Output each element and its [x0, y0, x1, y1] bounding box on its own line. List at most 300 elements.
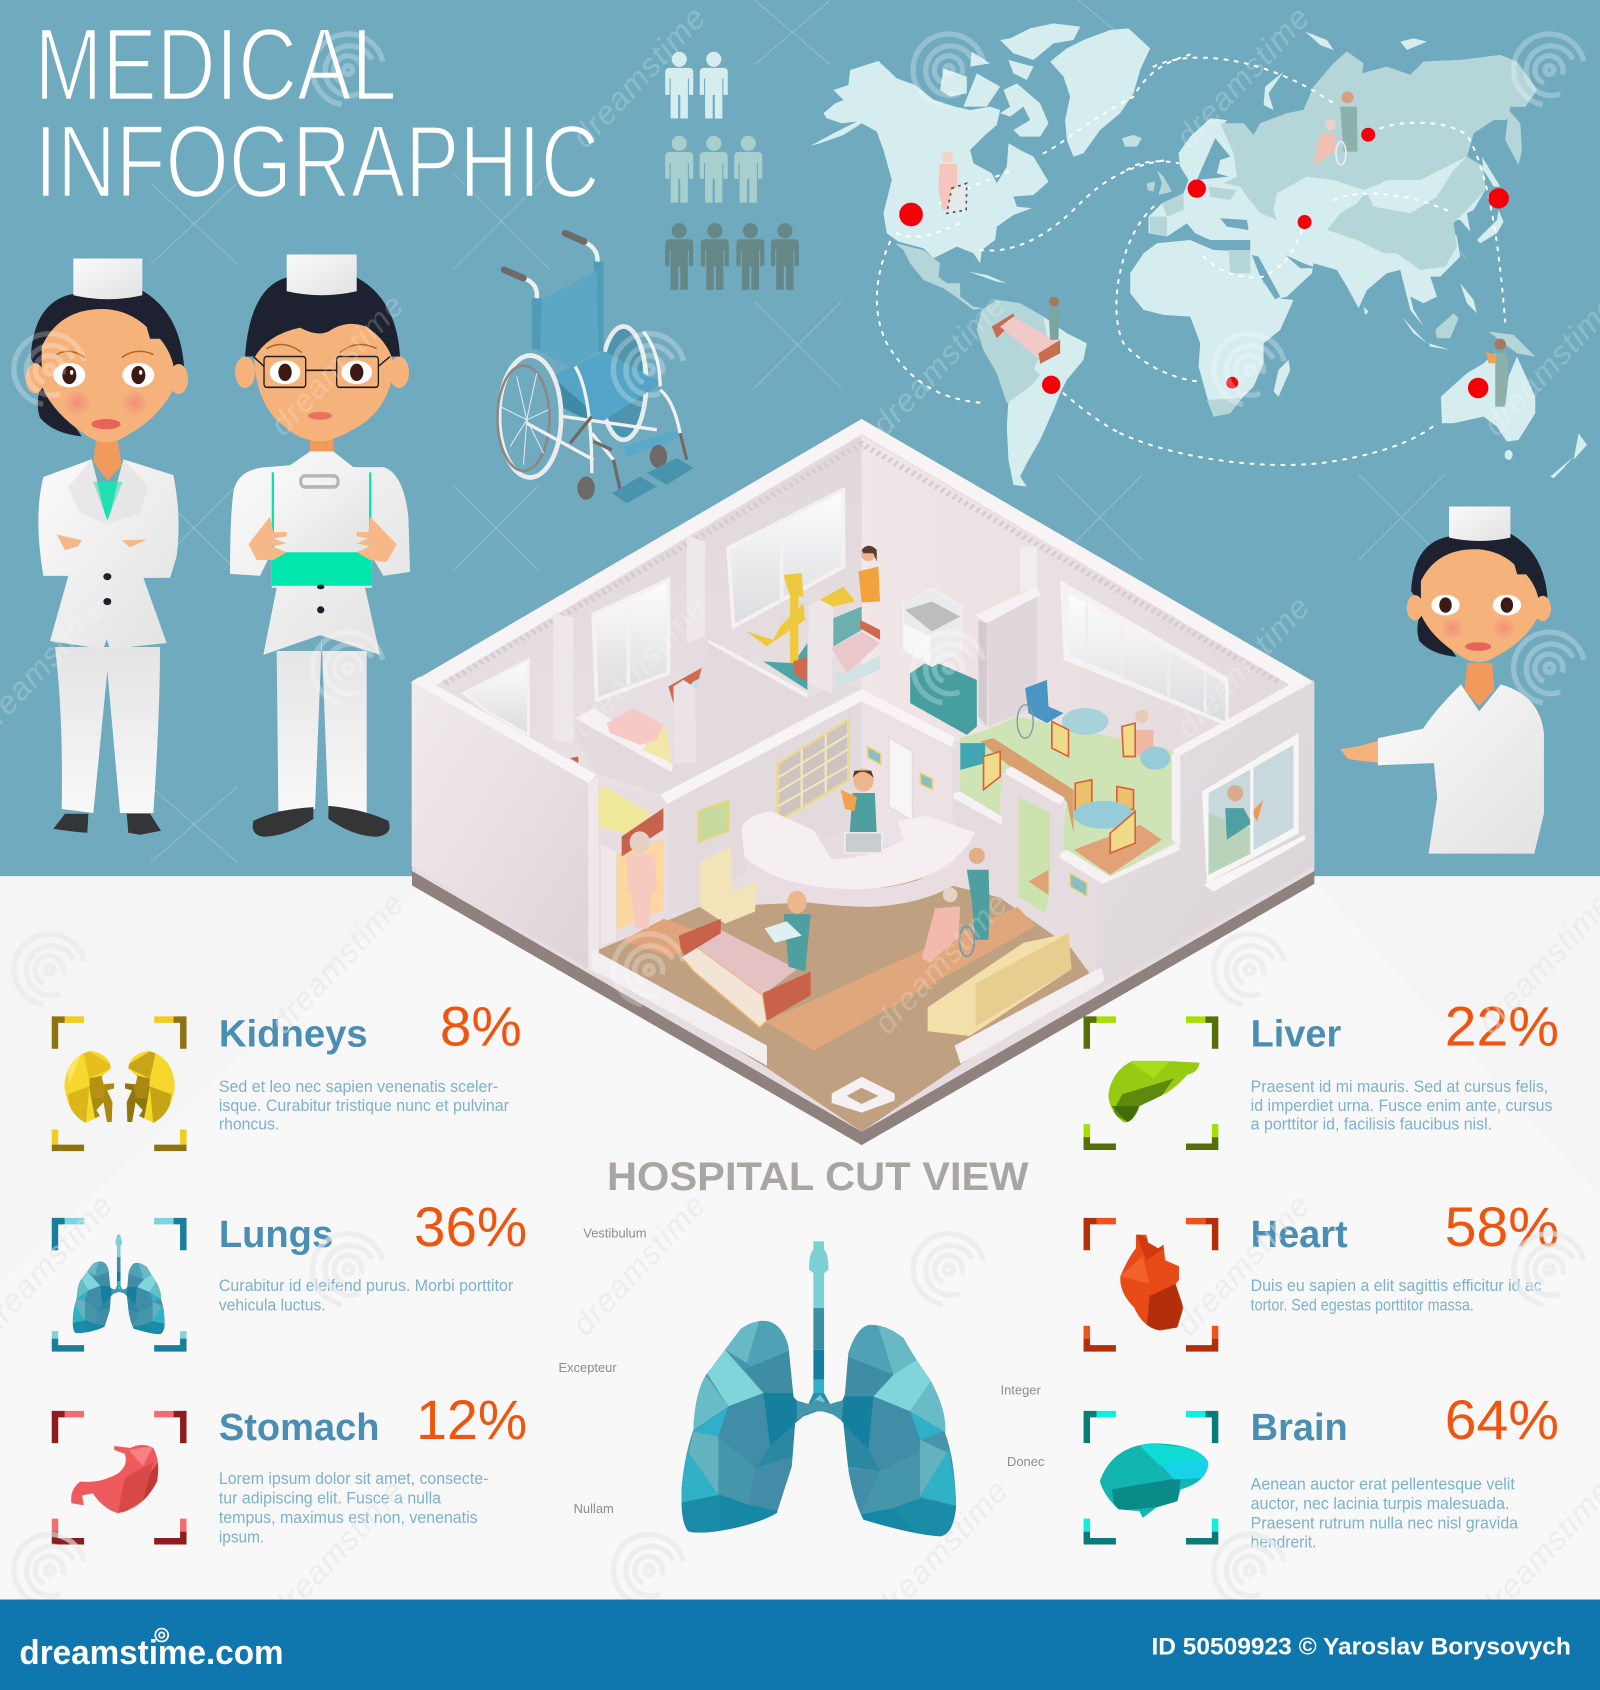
- lobby back: [598, 689, 1101, 1132]
- description: liver: a porttitor id, facilisis faucibus nisl.: [1251, 1116, 1492, 1134]
- window right glass: [1069, 593, 1225, 722]
- hospital cut view illustration: [412, 419, 1314, 1145]
- back wall right: [862, 436, 1293, 873]
- wheelchair wheel: [960, 926, 974, 956]
- wheelchair nurse body: [967, 870, 990, 940]
- lips: [308, 412, 332, 420]
- watermark spirals and wordmarks: dreamstime: [564, 0, 713, 155]
- red location dots: [899, 128, 1509, 398]
- hand: [1340, 739, 1382, 763]
- casters: [577, 445, 667, 500]
- percent: lungs: 36%: [414, 1195, 527, 1258]
- nurse 2: glasses and clipboard: [230, 255, 410, 837]
- arch top: [1005, 766, 1065, 805]
- liver light facet: [1129, 1061, 1170, 1079]
- peach room wall: [617, 840, 663, 930]
- description: liver: id imperdiet urna. Fusce enim ante, cursus: [1251, 1097, 1553, 1115]
- description: stomach: tempus, maximus est non, venenatis: [219, 1509, 478, 1527]
- back wall left: [433, 436, 862, 797]
- lounge front sill: [1060, 843, 1180, 888]
- brows: [57, 351, 153, 358]
- orange nurse: [858, 546, 880, 603]
- stomach dark facet: [122, 1462, 158, 1512]
- background: soft shadow facets: [0, 876, 1600, 1599]
- stomach mid facet: [118, 1462, 153, 1513]
- bed B frame: [833, 655, 880, 686]
- watermark spirals and wordmarks: dreamstime: [864, 286, 1013, 442]
- face: [42, 309, 175, 442]
- grid chairs: [1075, 780, 1092, 813]
- background: blue upper area: [0, 0, 1600, 876]
- pillar top: [1020, 547, 1037, 593]
- lobby floor: [598, 878, 1101, 1132]
- bed front headboard: [763, 971, 811, 1021]
- description: heart: [1251, 1277, 1542, 1315]
- description: stomach: Lorem ipsum dolor sit amet, consecte-: [219, 1470, 488, 1488]
- outer right wall top: [1174, 682, 1314, 758]
- name: kidneys: Kidneys: [219, 1013, 368, 1055]
- left teal table: [960, 743, 985, 770]
- outer right wall: [1097, 680, 1314, 991]
- title: [35, 6, 599, 219]
- watermark spirals and wordmarks: dreamstime: [564, 1186, 713, 1342]
- canadian arctic islands: [940, 23, 1080, 137]
- name: brain: Brain: [1251, 1406, 1348, 1448]
- left kidney: [64, 1050, 114, 1123]
- centre left window: [593, 580, 668, 700]
- iceland: [1122, 135, 1142, 147]
- window mullion: [1247, 763, 1257, 853]
- description: brain: auctor, nec lacinia turpis malesuada.: [1251, 1495, 1509, 1513]
- description: kidneys: Sed et leo nec sapien venenatis sceler-: [219, 1078, 498, 1096]
- hat: [1449, 507, 1510, 541]
- wheelchair patient head: [943, 887, 958, 902]
- window right frame: [1060, 580, 1229, 727]
- description: kidneys: isque. Curabitur tristique nunc et pulvinar: [219, 1097, 509, 1115]
- partition post: [673, 680, 698, 776]
- blue wheelchair: [1017, 680, 1064, 738]
- description: kidneys: [219, 1078, 509, 1134]
- australia: [1441, 353, 1535, 442]
- room floor lower wall: [577, 718, 673, 796]
- mini patient with walker: [938, 151, 967, 213]
- central wall top band: [661, 689, 955, 804]
- patient lift: [747, 573, 855, 663]
- brain dark facet: [1112, 1478, 1181, 1511]
- description: liver: [1251, 1078, 1553, 1134]
- ears: [235, 357, 409, 388]
- people row 2: [665, 136, 762, 203]
- partition wall: [955, 740, 1097, 983]
- sakhalin: [1482, 157, 1500, 187]
- bed front head rail: [679, 919, 721, 957]
- right kidney: [124, 1050, 175, 1123]
- description: lungs: [219, 1277, 514, 1315]
- icon: lungs small: [71, 1235, 166, 1335]
- mini bed with nurse: [992, 297, 1060, 364]
- brain cyan facet: [1160, 1458, 1208, 1480]
- description: stomach: tur adipiscing elit. Fusce a nulla: [219, 1490, 441, 1508]
- central america: [895, 243, 983, 310]
- cornice: [412, 419, 1314, 687]
- chair by back table: [1052, 722, 1069, 756]
- nurse 3: presenting: [1340, 507, 1551, 854]
- background: watermark crosses: [151, 0, 1466, 862]
- outer wall post: [1172, 753, 1180, 846]
- armchair: [700, 847, 758, 924]
- left chair: [984, 751, 1000, 790]
- footer credit: ID 50509923 © Yaroslav Borysovych: [1151, 1634, 1571, 1660]
- bracket: stomach: [52, 1411, 187, 1544]
- glasses: [253, 357, 390, 387]
- name: heart: Heart: [1251, 1213, 1348, 1255]
- monitor: [845, 833, 882, 853]
- hands: [248, 517, 397, 562]
- jacket: [1378, 684, 1544, 854]
- icon: stomach: [71, 1445, 158, 1514]
- title line 2: INFOGRAPHIC: [35, 103, 599, 219]
- seat: [552, 352, 662, 423]
- brain bright facet: [1139, 1444, 1208, 1473]
- front chair: [1110, 811, 1135, 853]
- heart top facet: [1136, 1233, 1163, 1260]
- back table: [1062, 708, 1109, 735]
- description: stomach: ipsum.: [219, 1528, 264, 1546]
- far left window: [463, 660, 528, 735]
- stomach light facet: [128, 1446, 153, 1466]
- clipboard clip: [301, 476, 338, 487]
- lobby front: [592, 769, 1104, 1113]
- nurse behind window: [1225, 785, 1264, 840]
- hair back: [31, 289, 184, 436]
- blush: [1441, 617, 1516, 640]
- clipboard teal back: [272, 472, 372, 586]
- yellow bed: [598, 786, 652, 833]
- kamchatka: [1505, 110, 1522, 165]
- teal corridor floor: [910, 660, 977, 735]
- hat: [287, 255, 357, 295]
- partition sill: [954, 791, 1002, 825]
- bed B mattress: [832, 632, 880, 673]
- hospital shell: [412, 419, 1314, 1145]
- face: [1421, 549, 1540, 662]
- dark frame joints: [570, 416, 687, 490]
- red headboard: [622, 808, 663, 856]
- bed A mattress: [690, 673, 788, 740]
- patient in orange: [705, 661, 732, 755]
- eyes: [270, 360, 372, 384]
- row: brain: [1084, 1400, 1557, 1548]
- outer left wall: [412, 676, 599, 974]
- percent: kidneys: 8%: [440, 994, 522, 1057]
- brain base: [1100, 1443, 1208, 1518]
- head: [1407, 507, 1551, 662]
- reception desk top: [742, 811, 976, 890]
- face: [254, 324, 394, 441]
- britain and ireland: [1147, 170, 1172, 195]
- bracket: brain: [1084, 1411, 1218, 1544]
- spain france poland: [1150, 187, 1237, 237]
- neck: [1464, 663, 1494, 706]
- centre left mullion: [623, 605, 633, 685]
- patient left: [627, 831, 657, 928]
- old world: [1116, 32, 1587, 478]
- lips: [91, 419, 121, 429]
- window glass: [1209, 745, 1294, 875]
- ears: [1407, 595, 1551, 621]
- row: kidneys: [52, 994, 522, 1151]
- cart drawers: [903, 623, 930, 663]
- china: [1327, 157, 1485, 270]
- backrest: [540, 270, 598, 368]
- window frame: [1202, 733, 1299, 883]
- big wheel: [499, 356, 561, 477]
- percent: heart: 58%: [1445, 1195, 1559, 1258]
- icon: kidneys: [64, 1050, 175, 1123]
- central wall left face: [667, 701, 862, 914]
- description: lungs: Curabitur id eleifend purus. Morbi porttitor: [219, 1277, 514, 1295]
- scrub top: [93, 482, 123, 521]
- icon: heart: [1120, 1234, 1184, 1331]
- receptionist: [841, 769, 877, 833]
- watermark spirals and wordmarks: dreamstime: [866, 1472, 1015, 1628]
- round table: [607, 708, 663, 745]
- bracket: lungs: [52, 1218, 187, 1352]
- brows: [267, 344, 377, 353]
- wall top: [412, 676, 597, 783]
- description: lungs: vehicula luctus.: [219, 1297, 326, 1315]
- lips: [1465, 642, 1491, 651]
- jacket: [230, 451, 410, 655]
- south america darker north: [977, 300, 1048, 403]
- eyes: [53, 363, 154, 387]
- egypt and south africa: [1207, 250, 1250, 417]
- nurse with wheelchair: [922, 848, 990, 963]
- lounge back: [903, 547, 1229, 876]
- shoes: [53, 814, 161, 835]
- back frame: [532, 262, 603, 353]
- footrests: [612, 458, 693, 503]
- bracket: liver: [1084, 1016, 1218, 1150]
- door mat: [1029, 870, 1049, 895]
- name: stomach: Stomach: [219, 1406, 380, 1448]
- blush: [64, 389, 148, 416]
- red sea: [1252, 255, 1280, 299]
- borneo and new guinea: [1435, 313, 1535, 357]
- orange strip: [980, 738, 1074, 833]
- description: brain: [1251, 1476, 1518, 1552]
- diagram label: donec: Donec: [1007, 1454, 1045, 1469]
- footer bar: [0, 1599, 1600, 1690]
- russia: [1220, 52, 1537, 220]
- sofa: [928, 933, 1072, 1036]
- bed B cabinet teal: [833, 607, 862, 647]
- cart shelf: [905, 602, 960, 632]
- eyes: [1431, 595, 1521, 615]
- wall picture left: [699, 801, 729, 842]
- stomach base: [71, 1445, 158, 1514]
- far wheel: [601, 327, 646, 440]
- people row 3: [665, 223, 799, 290]
- diagram label: vestibulum: Vestibulum: [583, 1225, 647, 1240]
- crossed hands: [57, 534, 147, 550]
- neck: [93, 434, 122, 481]
- back window mullion: [777, 525, 787, 600]
- lounge floor: [957, 717, 1172, 876]
- heading: hospital cut view: HOSPITAL CUT VIEW: [607, 1155, 1029, 1199]
- back-left rooms: [463, 490, 880, 930]
- building mass: [412, 419, 1314, 1132]
- bed front mattress: [688, 928, 797, 995]
- seat side: [552, 377, 590, 421]
- foundation band: [412, 866, 1314, 1145]
- diagram label: excepteur: Excepteur: [558, 1360, 617, 1375]
- small picture: [1070, 873, 1087, 896]
- baltic and inland seas: [1197, 138, 1317, 268]
- pillars: [553, 535, 705, 743]
- room sill: [575, 708, 675, 773]
- caribbean: [968, 272, 1007, 283]
- corner post: [832, 1077, 895, 1113]
- orange corner: [1074, 825, 1162, 875]
- mini nurse with wheelchair: [1314, 91, 1358, 167]
- diagram label: nullam: Nullam: [574, 1501, 614, 1516]
- jacket: [38, 459, 179, 649]
- ears: [26, 363, 188, 394]
- right table: [1140, 746, 1170, 770]
- chair by patient: [1122, 723, 1135, 756]
- name: lungs: Lungs: [219, 1213, 333, 1255]
- large lungs diagram: [677, 1241, 960, 1540]
- row: stomach: [52, 1388, 527, 1546]
- front table: [1074, 801, 1134, 829]
- watermark spirals and wordmarks: dreamstime: [263, 885, 411, 1040]
- africa: [1130, 240, 1294, 417]
- pillar band: [975, 587, 1040, 623]
- grid chair right: [1117, 786, 1134, 810]
- tyre: [497, 366, 549, 471]
- heart base: [1120, 1234, 1184, 1331]
- pillar side: [979, 620, 987, 727]
- seated patient: [1130, 710, 1154, 756]
- row: liver: [1084, 994, 1559, 1150]
- description: heart: tortor. Sed egestas porttitor massa.: [1251, 1297, 1474, 1315]
- front low wall right: [955, 967, 1104, 1064]
- lapels: [68, 459, 148, 524]
- wheelchair nurse head: [969, 848, 985, 864]
- mini nurse in australia: [1486, 339, 1509, 407]
- routes west: [877, 53, 1193, 433]
- back room wall: [667, 643, 862, 793]
- spokes: [500, 373, 548, 465]
- description: brain: Praesent rutrum nulla nec nisl gravida: [1251, 1514, 1518, 1532]
- trousers: [55, 647, 160, 813]
- neck: [310, 438, 333, 473]
- percent: brain: 64%: [1445, 1388, 1559, 1451]
- routes east: [1116, 58, 1505, 465]
- bookcase: [778, 719, 848, 822]
- people row 1: [665, 52, 728, 119]
- heart dark facet: [1146, 1284, 1182, 1330]
- bedroom yellow floor: [698, 730, 753, 771]
- new zealand: [1550, 433, 1587, 478]
- world map: [810, 23, 1587, 487]
- percent: liver: 22%: [1445, 994, 1559, 1057]
- watermark spirals and wordmarks: dreamstime: [263, 1472, 411, 1628]
- red fragment: [570, 756, 578, 763]
- lift base red: [793, 657, 807, 681]
- description: stomach: [219, 1470, 488, 1546]
- front low wall left: [592, 949, 767, 1066]
- corner post inner: [847, 1088, 878, 1104]
- trousers: [277, 639, 367, 813]
- diagram label: integer: Integer: [1001, 1383, 1041, 1398]
- cornice dentils: [445, 444, 1280, 683]
- background: light lower area: [0, 876, 1600, 1599]
- icon: wheelchair: [497, 233, 693, 503]
- teal floor: [763, 643, 807, 690]
- white door: [889, 737, 913, 821]
- southeast asia: [1364, 283, 1477, 350]
- white frame: [527, 332, 687, 473]
- window sill: [1204, 835, 1305, 891]
- hair: [245, 277, 400, 357]
- bed A headboard: [668, 663, 710, 703]
- bed front frame: [682, 940, 767, 1027]
- post right: [808, 600, 833, 693]
- madagascar: [1274, 360, 1290, 397]
- grips and handle tubes: [523, 242, 598, 298]
- north america: [810, 61, 1048, 263]
- description: heart: Duis eu sapien a elit sagittis efficitur id ac: [1251, 1277, 1542, 1295]
- lobby carpet small: [622, 919, 712, 957]
- hair: [1411, 533, 1547, 657]
- room yellow floor: [642, 726, 672, 763]
- japan: [1477, 210, 1504, 243]
- door frame: [601, 845, 616, 945]
- icon: people rows: [665, 52, 799, 290]
- reception desk front: [745, 842, 980, 907]
- tasmania: [1505, 450, 1513, 460]
- heart light facet: [1120, 1256, 1150, 1284]
- window right mullions: [1087, 605, 1205, 717]
- description: kidneys: rhoncus.: [219, 1116, 279, 1134]
- bed B headboard: [860, 620, 880, 640]
- name: liver: Liver: [1251, 1013, 1342, 1055]
- eurasia: [1149, 52, 1537, 327]
- buttons: [103, 573, 111, 605]
- south america: [977, 300, 1087, 487]
- description: brain: hendrerit.: [1251, 1534, 1316, 1552]
- lounge front walls: [954, 680, 1314, 991]
- nurse 1: arms crossed: [26, 258, 188, 835]
- percent: stomach: 12%: [416, 1388, 527, 1451]
- bracket: kidneys: [52, 1016, 187, 1151]
- mongolia: [1369, 180, 1437, 212]
- wheelchair patient body: [922, 906, 960, 963]
- wall picture teal 2: [920, 773, 932, 790]
- liver base: [1108, 1060, 1200, 1123]
- liver dark facet: [1112, 1079, 1174, 1124]
- description: brain: Aenean auctor erat pellentesque velit: [1251, 1476, 1515, 1494]
- wall face: [412, 681, 598, 974]
- hat: [73, 258, 142, 299]
- central wall right face: [862, 701, 1006, 883]
- liver lower facet: [1112, 1106, 1140, 1122]
- shoes: [253, 806, 390, 837]
- bracket: heart: [1084, 1218, 1218, 1352]
- row: lungs: [52, 1195, 527, 1352]
